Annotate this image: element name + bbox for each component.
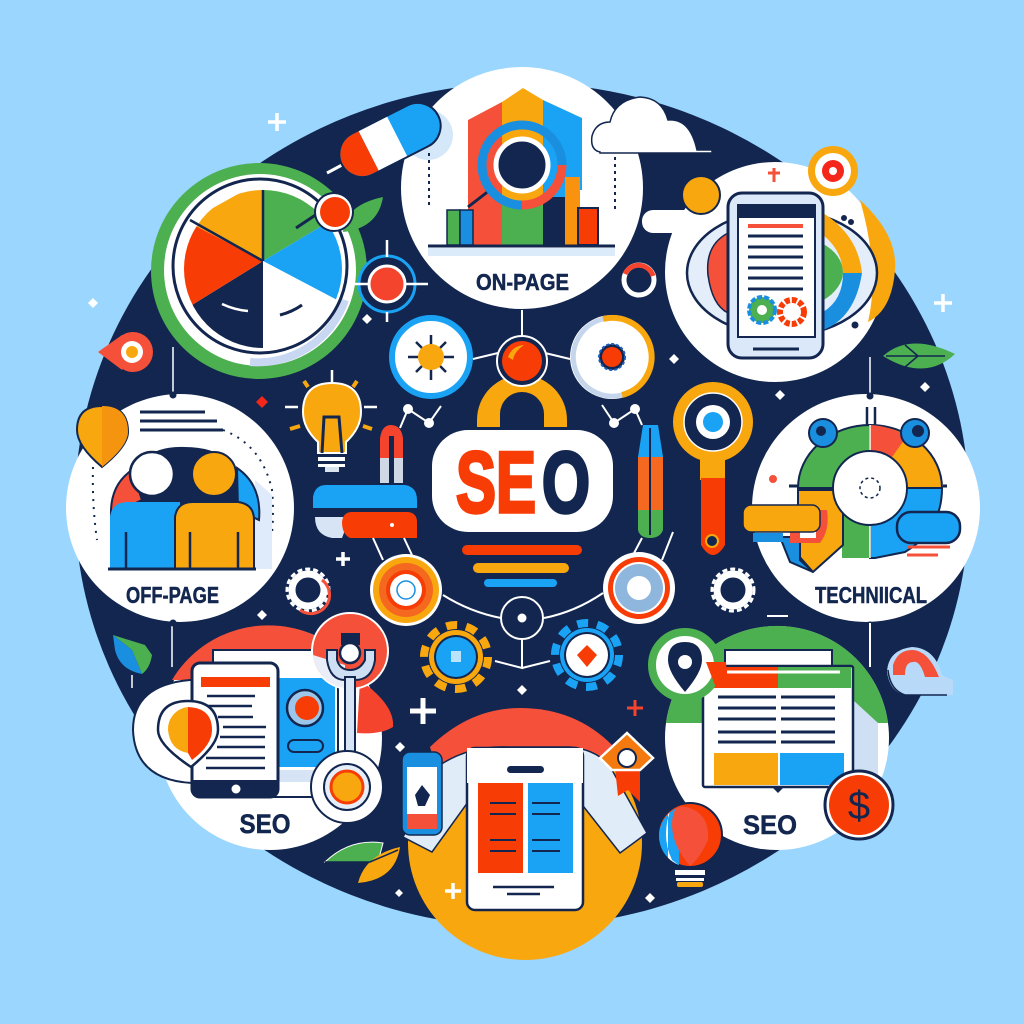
link chains	[400, 405, 642, 428]
icon: gear blue	[555, 623, 619, 687]
panel: seo bottom left: SEO	[240, 809, 290, 839]
title badge: SEO: SE	[456, 435, 536, 531]
icon: leaf right	[883, 343, 955, 369]
icon: ring	[624, 265, 654, 295]
icon: balloon bulb	[655, 800, 722, 887]
icon: target top right	[808, 146, 858, 196]
icon: location pin badge	[652, 632, 728, 698]
icon: leaf bottom	[325, 842, 400, 883]
icon: blue ring right	[603, 552, 675, 624]
panel: seo bottom right	[665, 623, 889, 850]
icon: target	[348, 240, 428, 322]
icon: eye	[98, 332, 153, 372]
panel: seo bottom right: SEO	[743, 810, 797, 840]
icon: ribbon badge	[600, 733, 653, 802]
panel: seo bottom left	[133, 625, 382, 850]
icon: stamp tool	[313, 425, 417, 538]
navy central circle	[75, 83, 969, 927]
icon: map pin orange	[77, 406, 128, 467]
panel: on-page: ON-PAGE	[476, 269, 569, 295]
panel: off-page	[66, 347, 294, 667]
icon: pen	[638, 425, 663, 538]
icon: pill	[327, 95, 449, 185]
decorations: sparkles	[88, 113, 952, 903]
title badge: SEO	[432, 430, 613, 532]
panel: on-page	[401, 67, 643, 309]
icon: wrench	[312, 613, 393, 757]
icon: dollar coin: $	[848, 784, 870, 828]
colour bars under title	[462, 545, 582, 587]
icon: small gears	[287, 569, 788, 616]
icon: small phone	[402, 752, 442, 835]
icon: leaf left	[113, 635, 152, 688]
panel: off-page: OFF-PAGE	[126, 582, 219, 608]
panel: pie chart	[151, 163, 383, 379]
connector network	[373, 532, 673, 668]
icon: gear orange	[424, 625, 488, 689]
red dot	[769, 475, 777, 483]
icon: orange badge	[311, 751, 383, 823]
icon: cloud	[592, 97, 712, 153]
panel: technical	[743, 357, 980, 628]
panel: bottom centre tablet	[403, 708, 647, 960]
icon: gear badge	[570, 315, 654, 399]
panel: technical: TECHNIICAL	[815, 582, 927, 608]
icon: small cloud right	[887, 647, 953, 695]
icon: magnifier	[673, 382, 753, 555]
icon: padlock and connector	[473, 310, 570, 427]
icon: dollar coin	[825, 771, 893, 839]
panel: phone	[642, 162, 895, 382]
icon: light bulb	[285, 370, 377, 472]
icon: sun badge	[392, 318, 470, 396]
icon: orange ring left	[370, 554, 442, 626]
icon: orange ball	[682, 176, 720, 214]
title badge: SEO: O	[542, 435, 590, 531]
